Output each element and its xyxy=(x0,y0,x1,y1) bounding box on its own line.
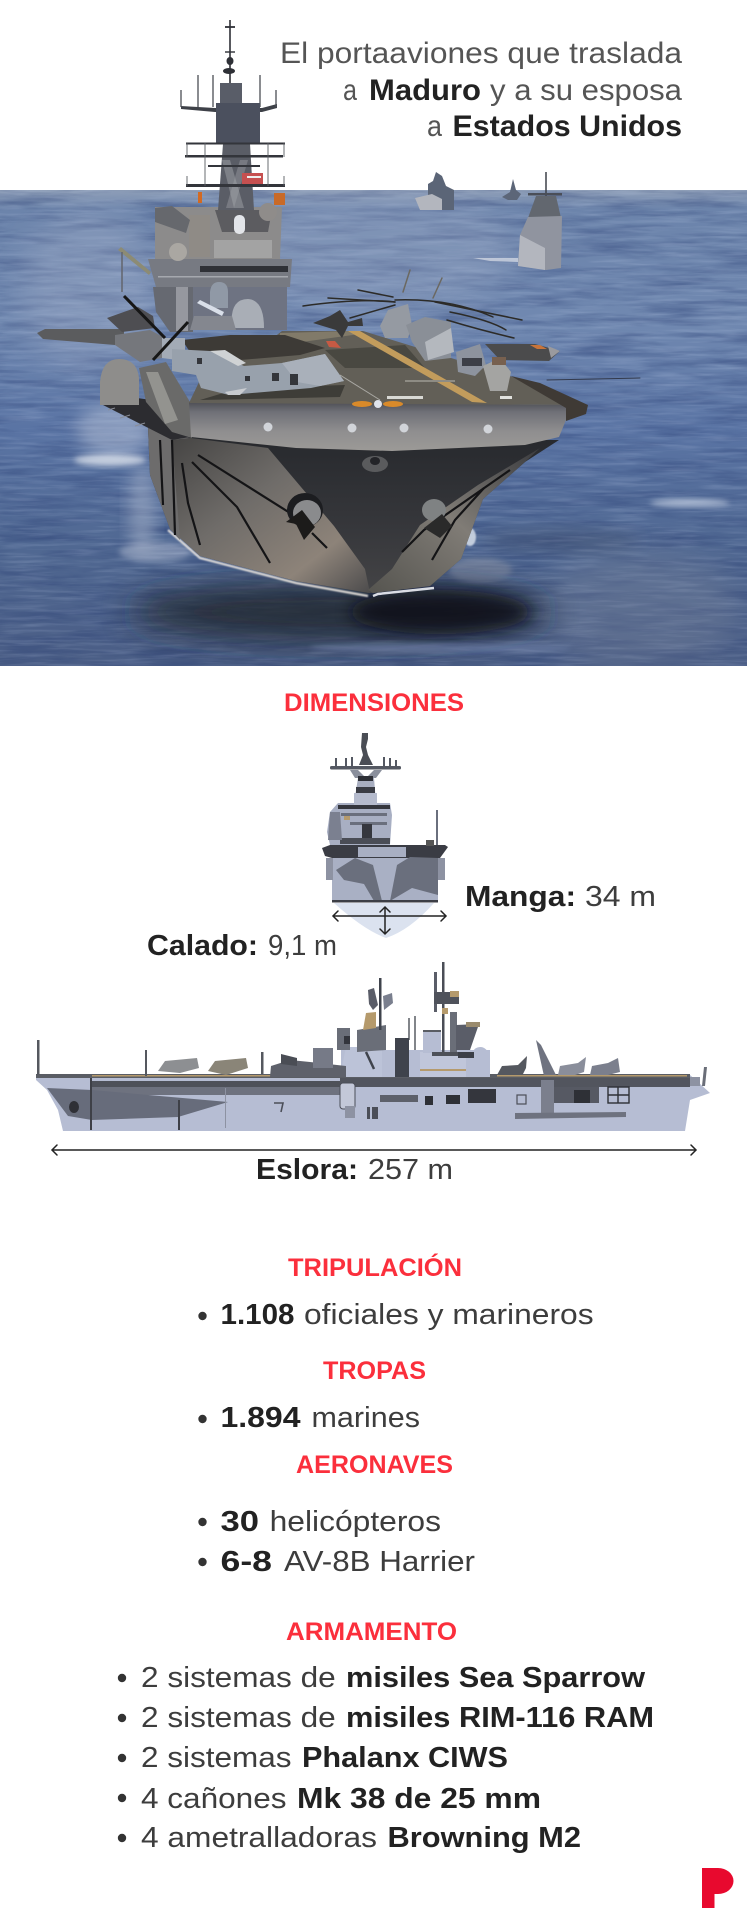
label: calado xyxy=(147,930,337,962)
helicopters on deck, right xyxy=(303,270,640,391)
heading: tripulacion: TRIPULACIÓN xyxy=(288,1252,462,1282)
sea xyxy=(0,190,747,670)
list: aeronaves: 6-8 xyxy=(220,1546,272,1578)
anchor domes xyxy=(286,456,452,540)
list: armamento: misiles RIM-116 RAM xyxy=(346,1702,654,1734)
title: a xyxy=(427,110,442,143)
title: y a su esposa xyxy=(490,74,682,107)
rotor blades xyxy=(303,270,640,380)
island superstructure xyxy=(118,203,292,332)
left sponson and hull-side structure xyxy=(100,359,192,440)
hull xyxy=(36,1067,710,1131)
list: armamento: Browning M2 xyxy=(388,1822,581,1854)
label: manga: 34 m xyxy=(585,881,656,913)
heading: tropas: TROPAS xyxy=(323,1357,426,1385)
list: tropas: 1.894 xyxy=(220,1402,300,1434)
arrow: manga xyxy=(333,911,446,921)
bow deck aircraft xyxy=(497,1040,687,1076)
list: tropas: marines xyxy=(312,1402,420,1434)
orange deck markings xyxy=(352,400,403,408)
mast and radar platforms xyxy=(181,20,285,210)
island xyxy=(337,1012,490,1077)
hull seams xyxy=(160,440,510,563)
title: El portaaviones que traslada xyxy=(280,37,682,70)
list: armamento: 4 ametralladoras xyxy=(141,1822,377,1854)
list: tropas xyxy=(198,1402,420,1434)
heading: armamento: ARMAMENTO xyxy=(286,1618,457,1646)
title: Maduro xyxy=(369,74,481,107)
elevator platforms xyxy=(32,307,560,361)
list: armamento xyxy=(118,1662,654,1854)
aft deck aircraft and superstructure xyxy=(37,1040,346,1077)
heading: dimensiones: DIMENSIONES xyxy=(284,689,464,717)
deck edge band xyxy=(189,402,576,451)
arrow: eslora xyxy=(52,1145,696,1155)
label: calado: Calado: xyxy=(147,930,258,962)
icon: publisher logo xyxy=(702,1868,733,1908)
flags xyxy=(198,173,285,205)
label: eslora xyxy=(256,1154,453,1186)
diagram: ship front view xyxy=(322,733,448,938)
panel: photo of the amphibious ship at sea xyxy=(0,20,747,670)
island xyxy=(327,793,392,845)
wake xyxy=(74,404,512,596)
flight deck and hull xyxy=(322,810,448,902)
list: armamento: 2 sistemas de xyxy=(141,1662,336,1694)
label: eslora: 257 m xyxy=(368,1154,453,1186)
underwater hull section xyxy=(334,903,434,938)
list: tripulacion: 1.108 xyxy=(220,1299,294,1331)
label: manga: Manga: xyxy=(465,881,576,913)
title xyxy=(280,37,682,143)
title: a xyxy=(343,74,357,107)
diagram: ship side view xyxy=(36,962,710,1155)
list: aeronaves: AV-8B Harrier xyxy=(284,1546,475,1578)
list: armamento: Mk 38 de 25 mm xyxy=(297,1783,541,1815)
helicopters on deck, left xyxy=(115,296,344,395)
list: tripulacion: oficiales y marineros xyxy=(304,1299,594,1331)
list: aeronaves: helicópteros xyxy=(270,1506,441,1538)
list: armamento: 4 cañones xyxy=(141,1783,286,1815)
label: calado: 9,1 m xyxy=(268,930,337,962)
list: armamento: Phalanx CIWS xyxy=(302,1742,508,1774)
heading: aeronaves: AERONAVES xyxy=(296,1451,453,1479)
list: armamento: misiles Sea Sparrow xyxy=(346,1662,645,1694)
flight deck xyxy=(189,331,588,421)
list: aeronaves: 30 xyxy=(220,1506,259,1538)
list: tripulacion xyxy=(198,1299,594,1331)
arrow: calado xyxy=(380,907,390,934)
distant ships xyxy=(415,172,562,270)
masts xyxy=(368,962,459,1052)
label: manga xyxy=(465,881,656,913)
list: armamento: 2 sistemas xyxy=(141,1742,292,1774)
mast xyxy=(330,733,401,803)
list: armamento: 2 sistemas de xyxy=(141,1702,336,1734)
list: aeronaves xyxy=(198,1506,475,1578)
title: Estados Unidos xyxy=(452,110,682,143)
label: eslora: Eslora: xyxy=(256,1154,358,1186)
hull xyxy=(148,428,559,593)
